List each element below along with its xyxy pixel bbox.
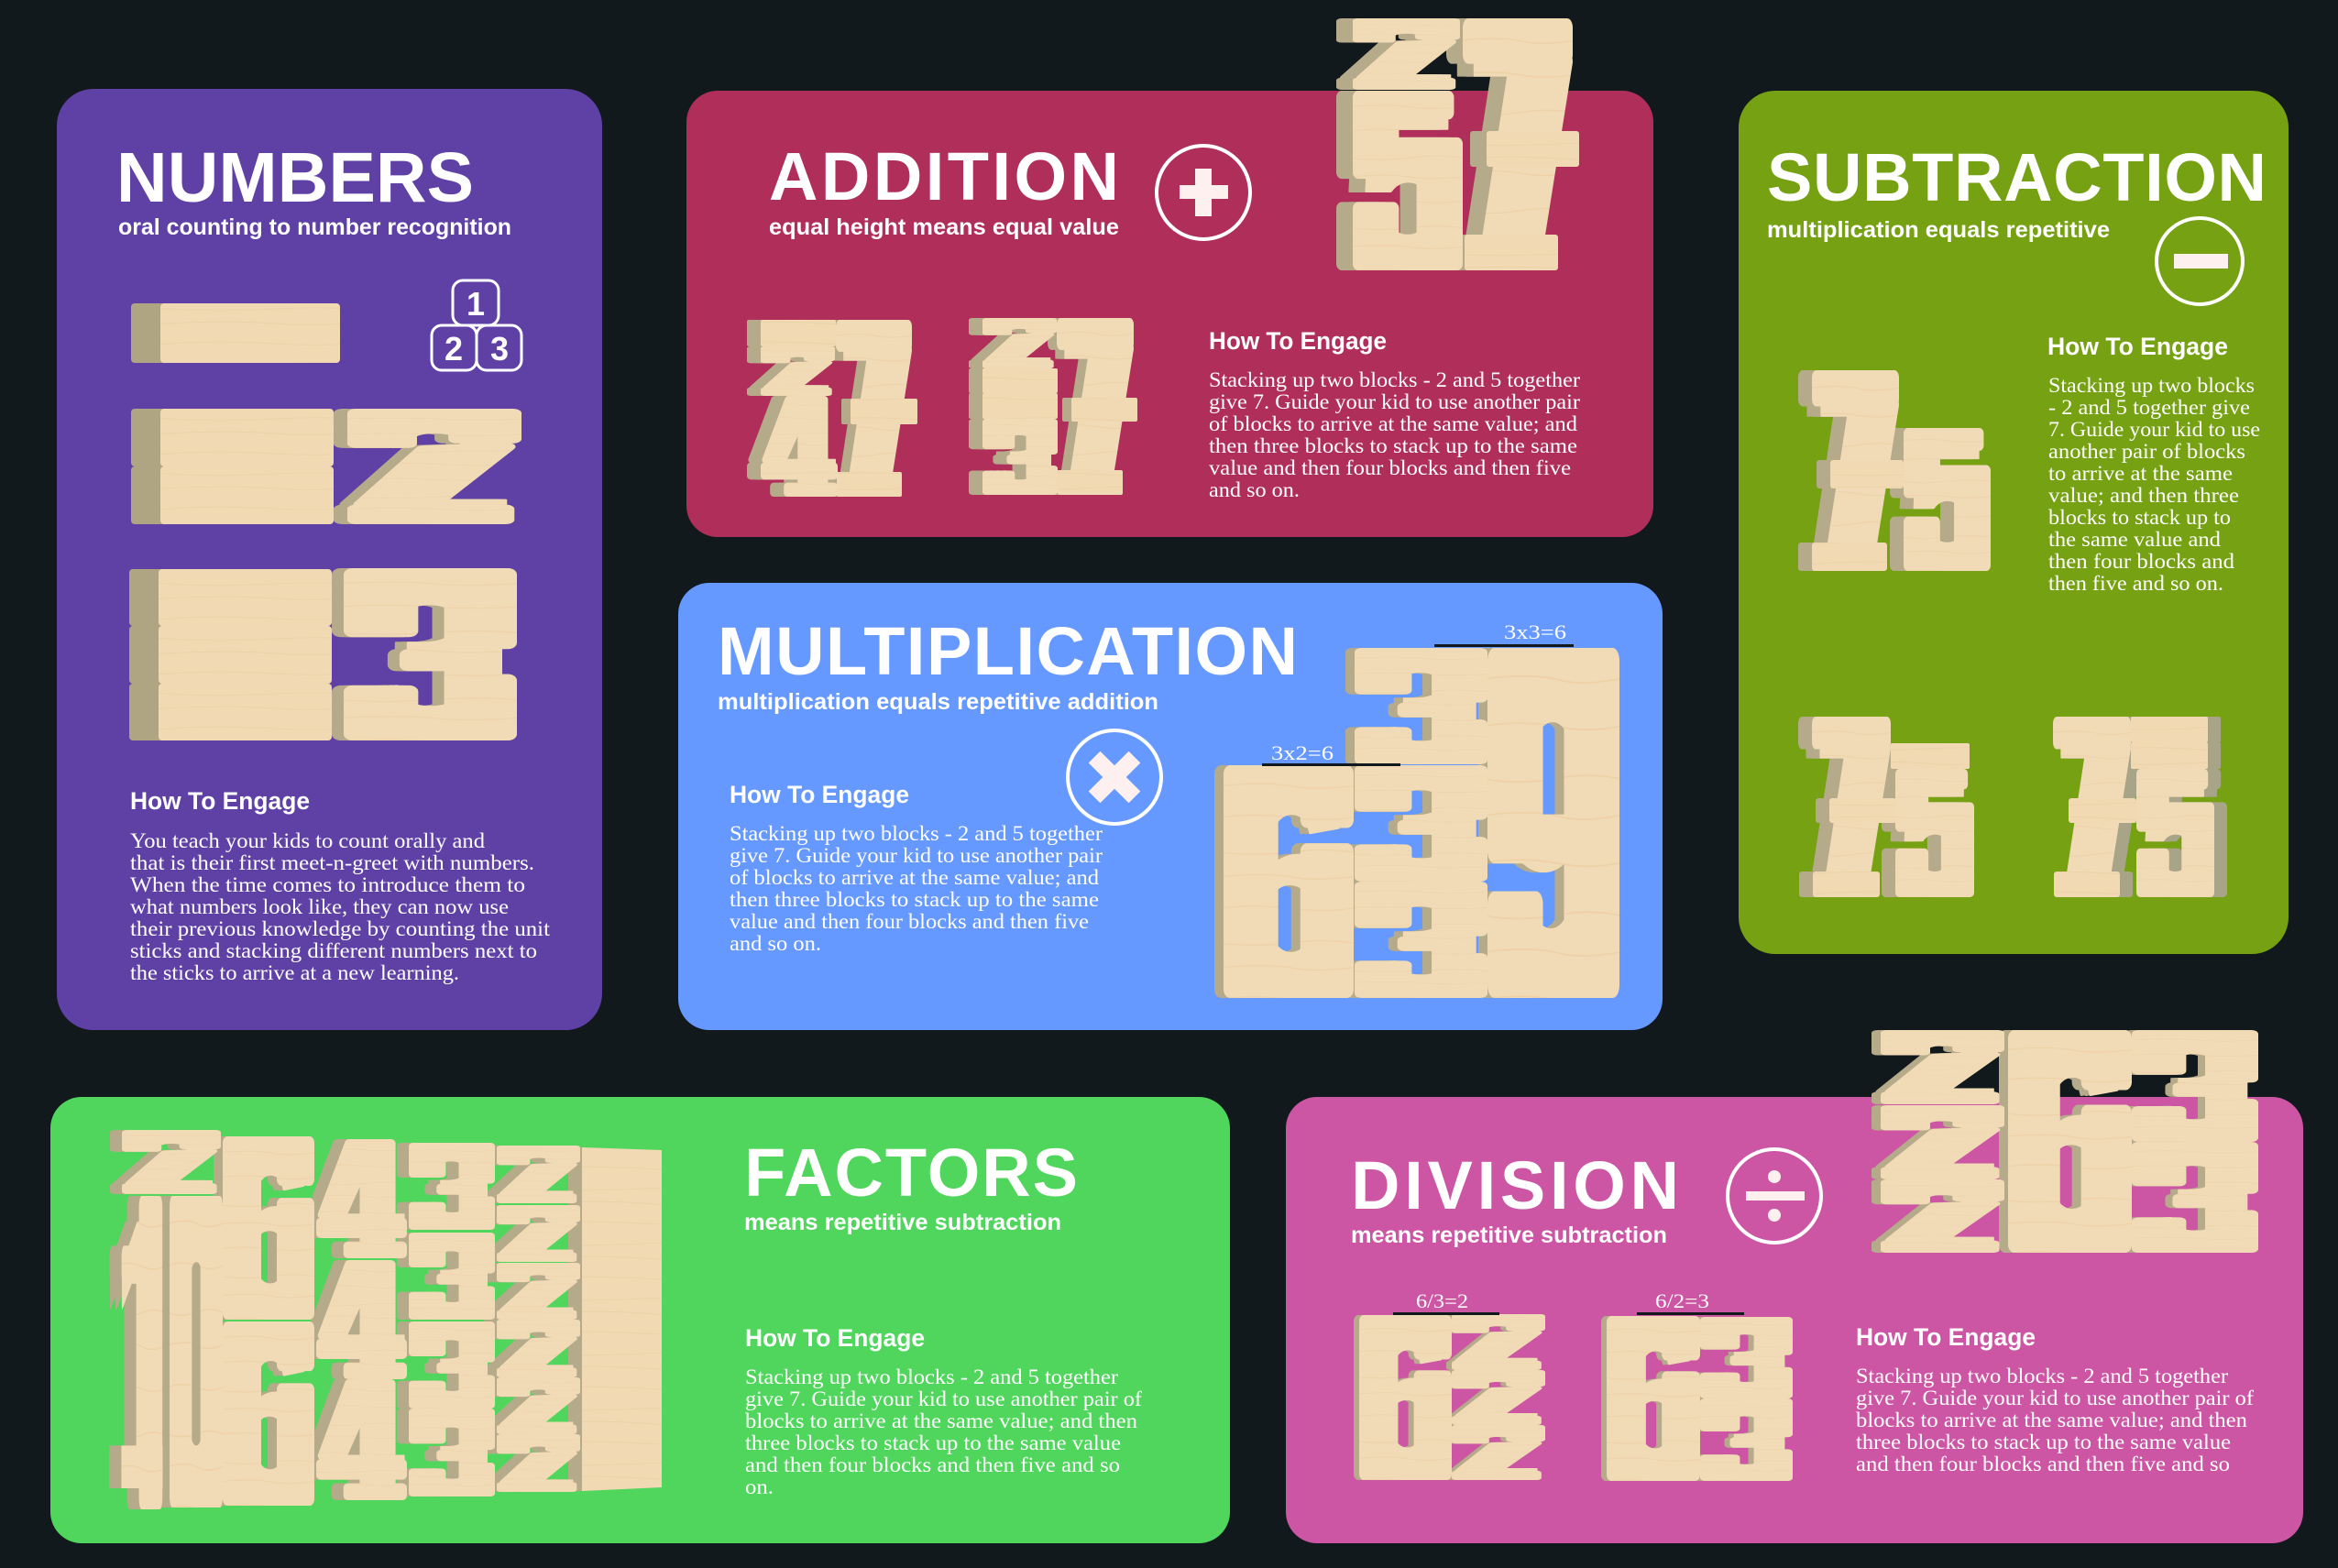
digit 4: 4 <box>319 1357 405 1523</box>
body text: numbers: You teach your kids to count orally and <box>130 829 486 852</box>
icon: plus in circle <box>1157 146 1250 239</box>
panel: numbers <box>57 89 602 1030</box>
digit 6: 6 <box>1228 724 1351 1041</box>
digit 3: 3 <box>985 405 1056 510</box>
body text: subtraction <box>2048 374 2260 595</box>
digit 2: 2 <box>499 1310 578 1388</box>
body text: factors: give 7. Guide your kid to use another pair of <box>745 1387 1142 1410</box>
digit 3: 3 <box>1703 1303 1791 1414</box>
body text: numbers: their previous knowledge by counting the unit <box>130 917 551 940</box>
equation label: 3x3=6: 3x3=6 <box>1504 620 1566 643</box>
digit 2: 2 <box>499 1367 578 1445</box>
digit 6: 6 <box>1362 1286 1450 1511</box>
equation label: 3x3=6 <box>1434 620 1574 647</box>
digit 2: 2 <box>126 1119 218 1206</box>
unit stick <box>160 466 334 524</box>
digit 4: 4 <box>319 1239 405 1401</box>
body text: numbers: sticks and stacking different numbers next to <box>130 939 537 962</box>
unit stick <box>159 684 332 740</box>
unit stick <box>159 626 332 684</box>
heading: factors: FACTORS <box>744 1135 1078 1211</box>
icon: divide in circle <box>1728 1149 1821 1243</box>
digit 3: 3 <box>2136 1123 2256 1274</box>
body text: subtraction: - 2 and 5 together give <box>2048 396 2250 419</box>
how to engage heading: How To Engage <box>745 1324 925 1352</box>
unit stick <box>982 368 1058 393</box>
digit 5: 5 <box>2139 747 2212 922</box>
body text: multiplication: give 7. Guide your kid to use another pair <box>730 844 1103 867</box>
digit 2: 2 <box>763 338 833 405</box>
digit 1 of 10: 1 <box>116 1142 165 1568</box>
heading: subtraction: SUBTRACTION <box>1767 139 2267 215</box>
unit stick <box>982 393 1058 419</box>
subheading: numbers: oral counting to number recognition <box>118 214 511 240</box>
icon: times in circle <box>1068 730 1161 824</box>
digit 4: 4 <box>319 1118 405 1280</box>
body text: numbers: the sticks to arrive at a new learning. <box>130 961 459 984</box>
body text: division: give 7. Guide your kid to use another pair of <box>1856 1387 2254 1409</box>
body text: subtraction: then five and so on. <box>2048 572 2223 595</box>
body text: numbers: that is their first meet-n-greet with numbers. <box>130 851 534 874</box>
digit 2: 2 <box>353 389 518 546</box>
digit 5: 5 <box>1898 746 1972 921</box>
blocks: 2 + 1 + 1 + 3 = 7 <box>982 288 1137 529</box>
digit 2: 2 <box>1454 1305 1543 1381</box>
digit 2: 2 <box>985 309 1055 378</box>
body text: numbers <box>130 829 551 984</box>
body text: subtraction: to arrive at the same <box>2048 462 2233 485</box>
digit 2: 2 <box>499 1253 578 1331</box>
body text: factors: on. <box>745 1475 774 1498</box>
icon: minus in circle <box>2157 218 2243 304</box>
blocks: factor stacks of 10 <box>116 1104 662 1568</box>
body text: subtraction: Stacking up two blocks <box>2048 374 2255 397</box>
body text: multiplication: Stacking up two blocks - 2 and 5 together <box>730 822 1103 845</box>
digit 3: 3 <box>412 1306 493 1425</box>
body text: division: Stacking up two blocks - 2 and 5 together <box>1856 1365 2228 1387</box>
digit 3: 3 <box>349 539 513 773</box>
body text: addition: then three blocks to stack up to the same <box>1209 434 1577 457</box>
body text: multiplication: of blocks to arrive at the same value; and <box>730 866 1100 889</box>
body text: addition: value and then four blocks and then five <box>1209 456 1571 479</box>
digit 2: 2 <box>1356 5 1457 103</box>
body text: subtraction: 7. Guide your kid to use <box>2048 418 2260 441</box>
body text: addition: and so on. <box>1209 478 1300 501</box>
how to engage heading: How To Engage <box>1209 327 1387 355</box>
digit 2: 2 <box>1454 1416 1543 1491</box>
blocks: two unit sticks and digit 2 <box>160 389 518 546</box>
panel: multiplication <box>678 583 1663 1063</box>
equation label: 6/3=2: 6/3=2 <box>1416 1289 1468 1312</box>
digit 7: 7 <box>2056 685 2129 931</box>
blocks: reversed 7 and 5 <box>2054 685 2212 931</box>
digit 2: 2 <box>1454 1361 1543 1436</box>
digit 4: 4 <box>763 379 836 516</box>
unit stick <box>761 320 836 346</box>
digit 9: 9 <box>1492 586 1617 1063</box>
how to engage heading: How To Engage <box>2047 333 2228 360</box>
unit stick <box>1891 743 1970 769</box>
digit 3: 3 <box>1359 627 1485 786</box>
digit 2: 2 <box>499 1135 578 1214</box>
subheading: division: means repetitive subtraction <box>1351 1223 1667 1248</box>
body text: numbers: what numbers look like, they can now use <box>130 895 509 918</box>
blocks: 6 and 3 3 <box>1609 1287 1791 1511</box>
digit 2: 2 <box>1885 1168 2002 1266</box>
icon: 1 2 3 cubes: 3 <box>490 330 509 367</box>
body text: addition <box>1209 368 1580 501</box>
body text: division: blocks to arrive at the same value; and then <box>1856 1409 2248 1431</box>
unit stick <box>159 569 332 626</box>
digit 6: 6 <box>225 1288 313 1541</box>
blocks: 7 and 5 <box>1812 334 1989 609</box>
subheading: subtraction: multiplication equals repetitive <box>1767 217 2110 243</box>
body text: subtraction: value; and then three <box>2048 484 2239 507</box>
subheading: multiplication: multiplication equals repetitive addition <box>718 689 1158 715</box>
unit stick column <box>582 1147 662 1491</box>
body text: multiplication: value and then four blocks and then five <box>730 910 1089 933</box>
blocks: 6 and 2 2 2 <box>1362 1286 1543 1511</box>
block: unit stick one <box>160 303 340 363</box>
digit 0 of 10: 0 <box>171 1140 222 1565</box>
heading: addition: ADDITION <box>769 138 1119 214</box>
blocks: 7 and 1 + 5 <box>1813 685 1972 932</box>
body text: subtraction: another pair of blocks <box>2048 440 2245 463</box>
digit 3: 3 <box>1703 1385 1791 1497</box>
digit 7: 7 <box>1815 334 1897 609</box>
digit 2: 2 <box>1885 1092 2002 1193</box>
body text: factors: blocks to arrive at the same value; and then <box>745 1409 1138 1432</box>
body text: division: and then four blocks and then five and so <box>1856 1453 2230 1475</box>
how to engage heading: How To Engage <box>1856 1323 2036 1351</box>
digit 6: 6 <box>2013 992 2129 1295</box>
digit 3: 3 <box>412 1217 493 1336</box>
digit 7: 7 <box>1059 288 1132 529</box>
how to engage heading: How To Engage <box>130 787 310 815</box>
equation label: 6/2=3: 6/2=3 <box>1655 1289 1709 1312</box>
body text: numbers: When the time comes to introduce them to <box>130 873 525 896</box>
body text: factors: three blocks to stack up to the same value <box>745 1431 1121 1454</box>
body text: addition: give 7. Guide your kid to use another pair <box>1209 390 1580 413</box>
body text: multiplication <box>730 822 1103 955</box>
panel: addition <box>686 0 1653 537</box>
digit 7: 7 <box>1815 685 1889 932</box>
panel: division <box>1286 992 2303 1543</box>
heading: numbers: NUMBERS <box>116 138 474 217</box>
body text: multiplication: then three blocks to stack up to the same <box>730 888 1099 911</box>
icon: 1 2 3 cubes: 1 <box>467 285 485 323</box>
body text: subtraction: blocks to stack up to <box>2048 506 2231 529</box>
digit 3: 3 <box>412 1393 493 1513</box>
blocks: 6, 3 3 3, 9 <box>1228 586 1617 1063</box>
unit stick <box>2131 717 2208 742</box>
equation label: 6/3=2 <box>1393 1289 1499 1315</box>
digit 2: 2 <box>1885 1017 2002 1118</box>
blocks: 1 + 2 + 4 = 7 <box>761 289 917 531</box>
unit stick <box>2131 742 2208 769</box>
digit 6: 6 <box>1609 1287 1698 1511</box>
body text: addition: Stacking up two blocks - 2 and 5 together <box>1209 368 1580 391</box>
heading: division: DIVISION <box>1351 1147 1679 1223</box>
equation label: 6/2=3 <box>1637 1289 1744 1315</box>
body text: factors <box>745 1365 1142 1498</box>
digit 7: 7 <box>839 289 910 531</box>
body text: subtraction: the same value and <box>2048 528 2222 551</box>
body text: factors: Stacking up two blocks - 2 and 5 together <box>745 1365 1118 1388</box>
digit 5: 5 <box>1356 60 1460 304</box>
body text: division <box>1856 1365 2254 1475</box>
icon: 1 2 3 cubes: 2 <box>445 330 463 367</box>
body text: factors: and then four blocks and then five and so <box>745 1453 1120 1476</box>
icon: 1 2 3 cubes <box>432 280 521 370</box>
body text: multiplication: and so on. <box>730 932 821 955</box>
how to engage heading: How To Engage <box>730 781 909 808</box>
blocks: 2 + 5 = 7 <box>1356 0 1579 317</box>
heading: multiplication: MULTIPLICATION <box>718 613 1298 689</box>
blocks: 2 2 2, 6, 3 3 <box>1885 992 2256 1295</box>
digit 3: 3 <box>412 1127 493 1246</box>
digit 3: 3 <box>2136 1011 2256 1163</box>
panel: factors <box>50 1097 1230 1568</box>
digit 3: 3 <box>1359 861 1485 1020</box>
equation label: 3x2=6: 3x2=6 <box>1271 741 1334 764</box>
digit 3: 3 <box>1359 744 1485 904</box>
body text: division: three blocks to stack up to the same value <box>1856 1431 2231 1453</box>
subheading: factors: means repetitive subtraction <box>744 1210 1061 1235</box>
blocks: three unit sticks and digit 3 <box>159 539 513 773</box>
equation label: 3x2=6 <box>1262 741 1400 766</box>
digit 2: 2 <box>499 1195 578 1273</box>
subheading: addition: equal height means equal value <box>769 214 1119 240</box>
digit 6: 6 <box>225 1104 313 1354</box>
body text: addition: of blocks to arrive at the same value; and <box>1209 412 1578 435</box>
digit 5: 5 <box>1906 403 1989 598</box>
digit 2: 2 <box>499 1424 578 1503</box>
unit stick <box>160 409 334 466</box>
panel: subtraction <box>1739 91 2289 954</box>
body text: subtraction: then four blocks and <box>2048 550 2235 573</box>
